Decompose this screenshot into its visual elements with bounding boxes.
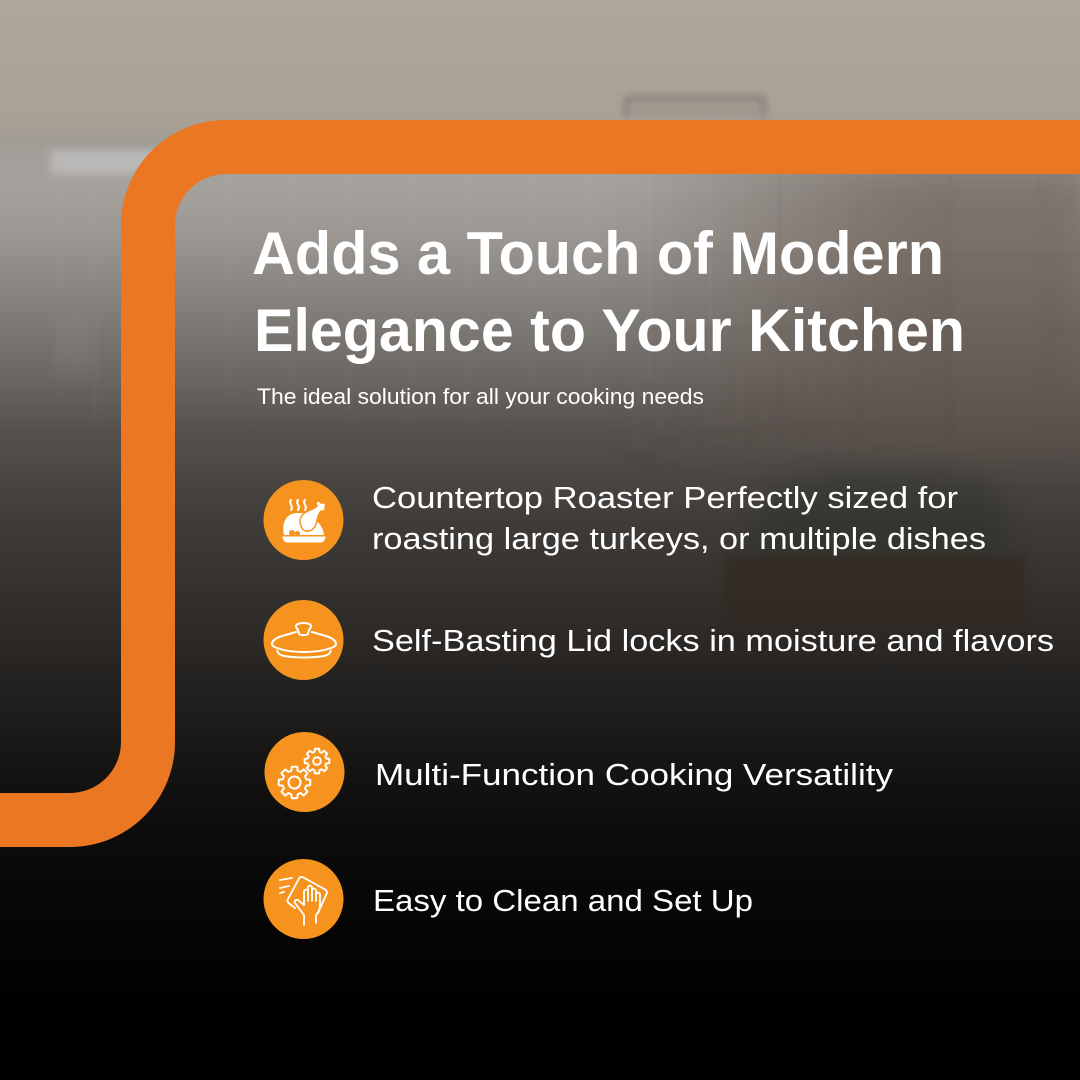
title (252, 220, 965, 364)
feature text: countertop roaster (372, 480, 986, 556)
subtitle: The ideal solution for all your cooking needs (257, 384, 704, 409)
title: Adds a Touch of Modern (252, 220, 944, 287)
feature: multi-function (264, 732, 894, 812)
feature: easy to clean (264, 859, 753, 939)
feature text: multi-function: Multi-Function Cooking Versatility (375, 757, 894, 792)
feature text: easy to clean: Easy to Clean and Set Up (373, 883, 753, 918)
icon: gears (264, 732, 344, 812)
feature text: countertop roaster: Countertop Roaster Perfectly sized for (372, 480, 958, 515)
feature: countertop roaster (264, 480, 986, 560)
feature text: self-basting lid: Self-Basting Lid locks in moisture and flavors (372, 623, 1054, 658)
feature text: countertop roaster: roasting large turkeys, or multiple dishes (372, 521, 986, 556)
icon: lid (264, 600, 344, 680)
feature: self-basting lid (264, 600, 1054, 680)
icon: roast turkey (264, 480, 344, 560)
orange frame band (0, 147, 1080, 820)
icon: hand wiping (264, 859, 344, 939)
title: Elegance to Your Kitchen (254, 297, 965, 364)
